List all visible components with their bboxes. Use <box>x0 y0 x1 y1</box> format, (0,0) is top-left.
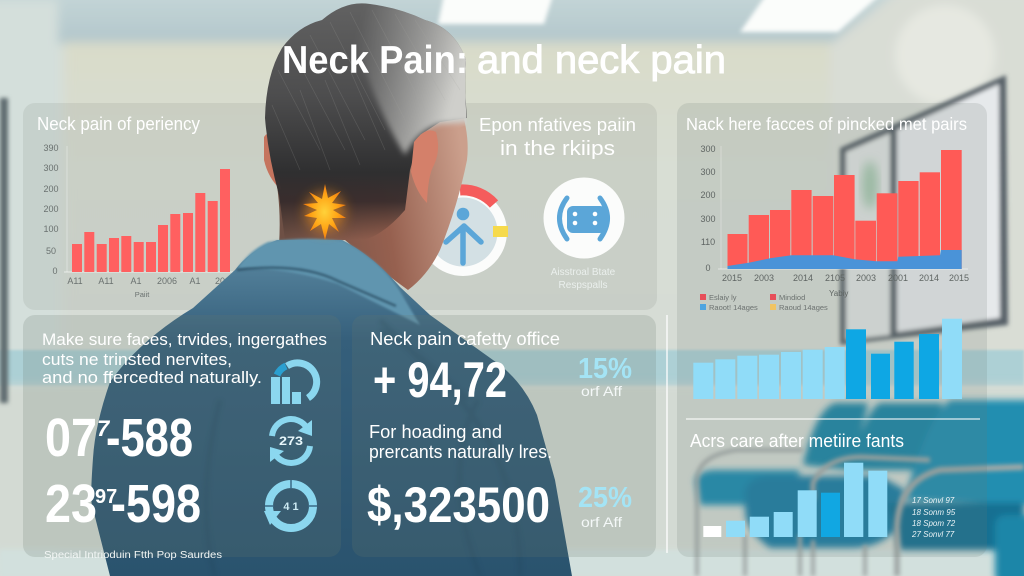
red bar chart <box>43 143 236 299</box>
icon: segmented ring: 4 1 <box>283 501 299 513</box>
panel: stacked chart <box>677 103 987 557</box>
red bar chart: A1 <box>130 276 142 286</box>
person seen from behind <box>91 3 572 576</box>
stat: 07-588: 7 <box>97 416 111 441</box>
chart legend: Raoot! 14ages <box>709 303 758 312</box>
icon: bars and arc <box>271 363 317 404</box>
main title: and neck pain <box>477 39 726 82</box>
left ear <box>264 134 281 190</box>
red bar chart: 200 <box>43 184 59 194</box>
red bar chart: 390 <box>43 143 59 153</box>
stacked bar chart: 2003 <box>856 273 876 283</box>
blue bar chart <box>693 319 962 399</box>
icon caption: Respspalls <box>559 280 607 291</box>
stat: 23-598: 23 <box>45 474 97 534</box>
ceiling lights <box>438 0 880 32</box>
stat: 94,72: + 94,72 <box>373 352 507 408</box>
footnote: Special Intrioduin Ftth Pop Saurdes <box>44 550 222 561</box>
stat: 07-588: 07 <box>45 408 97 468</box>
panel heading: Neck pain of periency <box>37 114 200 134</box>
red bar chart: Paiit <box>135 290 150 299</box>
stacked bar chart: 0 <box>705 263 711 273</box>
panel heading: Neck pain cafetty office <box>370 329 560 349</box>
panel: neck pain frequency <box>23 103 343 310</box>
panel: epon natives pain: in the rkiips <box>500 138 615 160</box>
chart legend: Mindiod <box>779 293 805 302</box>
lower chart key <box>911 496 956 539</box>
red bar chart: A11 <box>98 276 114 286</box>
icon: cycle 273: 273 <box>279 434 303 448</box>
stacked bar chart: 2105 <box>825 273 845 283</box>
stacked bar chart: 200 <box>700 190 716 200</box>
stat: 23-598 <box>45 474 201 534</box>
stacked bar chart: 300 <box>700 144 716 154</box>
panel: facts and figures <box>23 315 341 557</box>
stat: 25% off: 25% <box>578 482 632 514</box>
red bar chart: 2024 <box>215 276 235 286</box>
stacked bar chart: 300 <box>700 214 716 224</box>
stacked bar chart: 2015 <box>722 273 742 283</box>
chart legend: Raoud 14ages <box>779 303 828 312</box>
chart legend: Eslaiy ly <box>709 293 737 302</box>
stat: 07-588: -588 <box>106 408 193 468</box>
red bar chart: 200 <box>43 204 59 214</box>
red bar chart: A11 <box>67 276 83 286</box>
lower bar chart <box>703 463 887 537</box>
body text <box>369 422 552 462</box>
hair <box>265 3 467 242</box>
panel: epon natives pain <box>343 103 657 310</box>
stat: 23-598: 97 <box>95 486 117 508</box>
red bar chart: 2006 <box>157 276 177 286</box>
red bar chart: 50 <box>46 246 56 256</box>
red bar chart: 300 <box>43 163 59 173</box>
intro text: Make sure faces, trvides, ingergathes <box>42 330 327 349</box>
panel heading: Epon nfatives paiin <box>479 114 636 135</box>
stacked bar chart: 2014 <box>919 273 939 283</box>
intro text <box>42 330 327 387</box>
panel heading: Nack here facces of pincked met pairs <box>686 114 967 134</box>
stat: 15% off <box>578 353 632 399</box>
lower chart heading: Acrs care after metiire fants <box>690 431 904 451</box>
lower chart key: 18 Spom 72 <box>912 519 956 528</box>
waiting room chairs <box>695 400 1024 576</box>
red bar chart: 0 <box>52 266 58 276</box>
chart legend <box>700 293 828 312</box>
stacked bar chart: 110 <box>701 237 715 247</box>
icon: glowing neck pain burst <box>303 184 346 240</box>
stacked bar chart: 2001 <box>888 273 908 283</box>
stat: $,323500: $,323500 <box>367 477 550 533</box>
icon: spine device circle <box>544 178 624 258</box>
intro text: and no ffercedted naturally. <box>42 368 262 387</box>
icon: cycle 273 <box>270 419 312 463</box>
stacked bar chart: Yabiy <box>829 289 848 298</box>
lower chart key: 18 Sonm 95 <box>912 508 956 517</box>
icon: segmented ring <box>264 480 317 528</box>
stat: 15% off: orf Aff <box>581 383 622 399</box>
stacked bar chart: 2014 <box>793 273 813 283</box>
main title: Neck Pain: <box>282 39 468 82</box>
icon caption: Aisstroal Btate <box>551 267 616 278</box>
right ear <box>411 130 438 203</box>
body text: prercants naturally lres. <box>369 442 552 462</box>
stacked bar chart: 300 <box>700 167 716 177</box>
stacked bar chart <box>700 144 969 298</box>
main title <box>282 39 726 82</box>
lower chart key: 17 Sonvl 97 <box>912 496 955 505</box>
body text: For hoading and <box>369 422 502 442</box>
panel: safety office figures <box>352 315 656 557</box>
stacked bar chart: 2003 <box>754 273 774 283</box>
red bar chart: A1 <box>189 276 201 286</box>
stat: 07-588 <box>45 408 193 468</box>
red bar chart: 100 <box>43 224 59 234</box>
intro text: cuts ne trinsted nervites, <box>42 350 232 369</box>
stacked bar chart: 2015 <box>949 273 969 283</box>
stat: 15% off: 15% <box>578 353 632 385</box>
stat: 23-598: -598 <box>111 474 201 534</box>
icon: person in ring gauge <box>424 190 508 271</box>
wall pictures <box>0 75 1008 403</box>
shirt <box>91 240 572 576</box>
lower chart key: 27 Sonvl 77 <box>911 530 955 539</box>
icon caption <box>551 267 616 291</box>
stat: 25% off <box>578 482 632 530</box>
stat: 25% off: orf Aff <box>581 514 622 530</box>
neck and head skin <box>272 105 468 290</box>
